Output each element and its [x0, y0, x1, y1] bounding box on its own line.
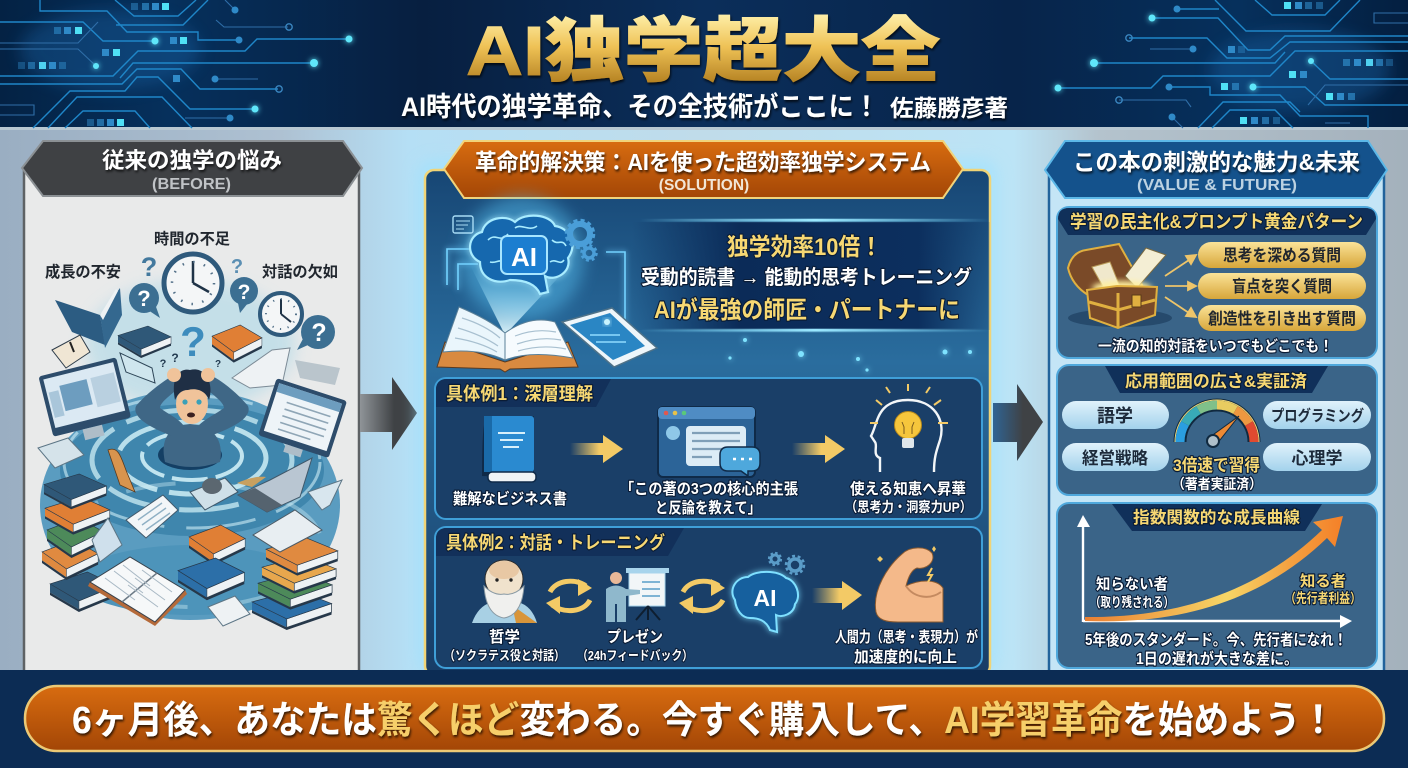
question marks: ? — [141, 252, 157, 282]
example 2 — [435, 527, 982, 668]
monitors — [38, 357, 347, 468]
call to action: 6ヶ月後、あなたは驚くほど変わる。今すぐ購入して、AI学習革命を始めよう！ — [72, 700, 1336, 742]
arrows: exchange — [679, 579, 725, 614]
icon: treasure chest — [1068, 244, 1172, 328]
arrow — [792, 435, 845, 463]
tagline banner — [632, 219, 990, 332]
tagline banner: 受動的読書 → 能動的思考トレーニング — [641, 265, 972, 289]
label: growth anxiety: 成長の不安 — [45, 262, 121, 281]
label: presentation: プレゼン — [607, 627, 663, 646]
sub-panel: breadth — [1057, 365, 1377, 495]
question marks: ? — [160, 358, 167, 370]
floating books and papers — [52, 288, 340, 388]
example 2 heading — [436, 528, 684, 556]
label: those who don't know — [1090, 575, 1174, 610]
pill: creativity — [1198, 305, 1366, 331]
label: presentation: （24hフィードバック） — [577, 648, 693, 663]
heading: before: 従来の独学の悩み — [102, 148, 282, 173]
heading: value: この本の刺激的な魅力&未来 — [1073, 149, 1360, 175]
whirlpool — [40, 390, 340, 620]
pills: fields: 語学 — [1097, 405, 1133, 426]
question marks: ? — [180, 318, 206, 365]
arrows to question types — [1165, 255, 1196, 317]
gauge caption — [1172, 456, 1262, 492]
gears — [570, 224, 590, 244]
label: wisdom — [845, 479, 972, 515]
caption: 1日の遅れが大きな差に。 — [1136, 649, 1298, 668]
sub-panel heading: 指数関数的な成長曲線 — [1133, 507, 1301, 527]
label: lack of dialogue: 対話の欠如 — [262, 262, 338, 281]
arrow — [812, 581, 862, 610]
sub-panel heading — [1058, 208, 1376, 235]
label: those who don't know: 知らない者 — [1096, 575, 1168, 593]
open book on floor — [88, 557, 187, 626]
label: philosophy: 哲学 — [489, 627, 520, 646]
icon: flexed arm — [875, 546, 943, 622]
caption: 5年後のスタンダード。今、先行者になれ！ — [1085, 630, 1347, 649]
gauge caption: 3倍速で習得 — [1173, 456, 1260, 475]
label: prompt: 「この著の3つの核心的主張 — [620, 479, 798, 498]
pill: blind spots — [1198, 273, 1366, 299]
header banner — [0, 0, 1408, 130]
illustration: overwhelmed learner in whirlpool — [38, 252, 347, 630]
label: human power: 加速度的に向上 — [854, 647, 957, 666]
label: time shortage: 時間の不足 — [154, 230, 230, 248]
panel: value and future — [1045, 141, 1387, 673]
debris in water — [108, 449, 342, 538]
label: wisdom: 使える知恵へ昇華 — [850, 479, 966, 498]
question marks: ? — [215, 359, 221, 370]
chart: exponential growth — [1077, 515, 1352, 628]
person — [135, 368, 249, 467]
pills: fields: プログラミング — [1271, 406, 1364, 425]
icon: chat window — [658, 407, 760, 477]
question marks: ? — [171, 351, 179, 365]
label: those who know: 知る者 — [1300, 572, 1346, 590]
question marks: ? — [231, 256, 243, 278]
pill: deepen thinking — [1198, 242, 1366, 268]
caption: 一流の知的対話をいつでもどこでも！ — [1098, 337, 1333, 355]
arrows: exchange — [546, 579, 592, 614]
icon: Socrates — [472, 560, 537, 623]
clocks — [164, 254, 302, 335]
icon: book — [482, 416, 536, 482]
heading: before: (BEFORE) — [152, 176, 231, 193]
heading: solution — [444, 141, 963, 198]
label: difficult book: 難解なビジネス書 — [453, 489, 567, 508]
title: AI独学超大全 — [466, 12, 940, 90]
sub-panel: growth curve — [1057, 503, 1377, 668]
panel: solution — [418, 141, 997, 675]
label: wisdom: （思考力・洞察力UP） — [845, 499, 972, 515]
subtitle: 佐藤勝彦著 — [890, 95, 1008, 121]
example 2 heading: 具体例2：対話・トレーニング — [446, 532, 665, 553]
hero illustration: AI brain and book: AI — [511, 242, 537, 272]
label: human power — [835, 628, 978, 666]
gauge caption: （著者実証済） — [1172, 476, 1262, 492]
tagline banner: 独学効率10倍！ — [727, 234, 882, 261]
caption — [1085, 630, 1347, 668]
AI chip — [501, 236, 547, 274]
page background — [0, 128, 1408, 673]
heading: before — [22, 141, 362, 196]
circuit pattern: right — [1054, 0, 1408, 128]
heading: value — [1045, 141, 1387, 198]
label: philosophy — [444, 627, 565, 663]
arrow: before to solution — [360, 377, 417, 450]
book stacks — [42, 474, 338, 630]
example 1 heading — [436, 379, 611, 407]
label: presentation — [577, 627, 693, 663]
label: prompt — [620, 479, 798, 517]
icon: AI brain — [732, 553, 804, 632]
sparkles — [728, 338, 972, 372]
label: those who know — [1285, 572, 1361, 606]
hero illustration: AI brain and book — [437, 196, 657, 372]
icon: head with light bulb — [870, 384, 948, 472]
heading: solution: 革命的解決策：AIを使った超効率独学システム — [475, 149, 931, 175]
pill: creativity: 創造性を引き出す質問 — [1208, 309, 1356, 328]
pills: fields: 心理学 — [1292, 448, 1342, 468]
call to action — [25, 686, 1384, 751]
label: human power: 人間力（思考・表現力）が — [835, 628, 978, 646]
arrow — [570, 435, 623, 463]
sub-panel heading — [1105, 366, 1328, 393]
icon: AI brain: AI — [754, 585, 776, 611]
label: those who don't know: （取り残される） — [1090, 594, 1174, 610]
question marks — [129, 252, 335, 370]
label: philosophy: （ソクラテス役と対話） — [444, 648, 565, 663]
chart: speed gauge — [1175, 400, 1259, 447]
heading: solution: (SOLUTION) — [659, 177, 749, 194]
sub-panel heading: 応用範囲の広さ&実証済 — [1125, 371, 1307, 391]
footer — [0, 670, 1408, 768]
brain — [470, 216, 572, 294]
pill: deepen thinking: 思考を深める質問 — [1223, 246, 1341, 265]
circuit pattern: left — [0, 0, 352, 128]
pills: fields: 経営戦略 — [1082, 448, 1148, 468]
arrow: solution to value — [993, 384, 1043, 461]
tablet — [562, 308, 657, 367]
example 1 heading: 具体例1：深層理解 — [446, 384, 593, 404]
tagline banner: AIが最強の師匠・パートナーに — [654, 296, 960, 324]
question marks: ? — [311, 319, 327, 347]
sub-panel heading: 学習の民主化&プロンプト黄金パターン — [1070, 211, 1363, 232]
question marks: ? — [238, 281, 250, 304]
panel: before — [22, 141, 362, 673]
example 1 — [435, 378, 982, 519]
open book — [437, 342, 578, 372]
sub-panel heading — [1112, 504, 1322, 531]
icon: presenter — [606, 568, 669, 622]
subtitle: AI時代の独学革命、その全技術がここに！ — [401, 91, 879, 122]
heading: value: (VALUE & FUTURE) — [1137, 177, 1297, 194]
sub-panel: prompt patterns — [1057, 207, 1377, 358]
question marks: ? — [137, 286, 151, 311]
label: prompt: と反論を教えて」 — [655, 498, 761, 517]
pills: fields — [1062, 401, 1371, 471]
pill: blind spots: 盲点を突く質問 — [1232, 277, 1332, 296]
label: those who know: （先行者利益） — [1285, 590, 1361, 606]
